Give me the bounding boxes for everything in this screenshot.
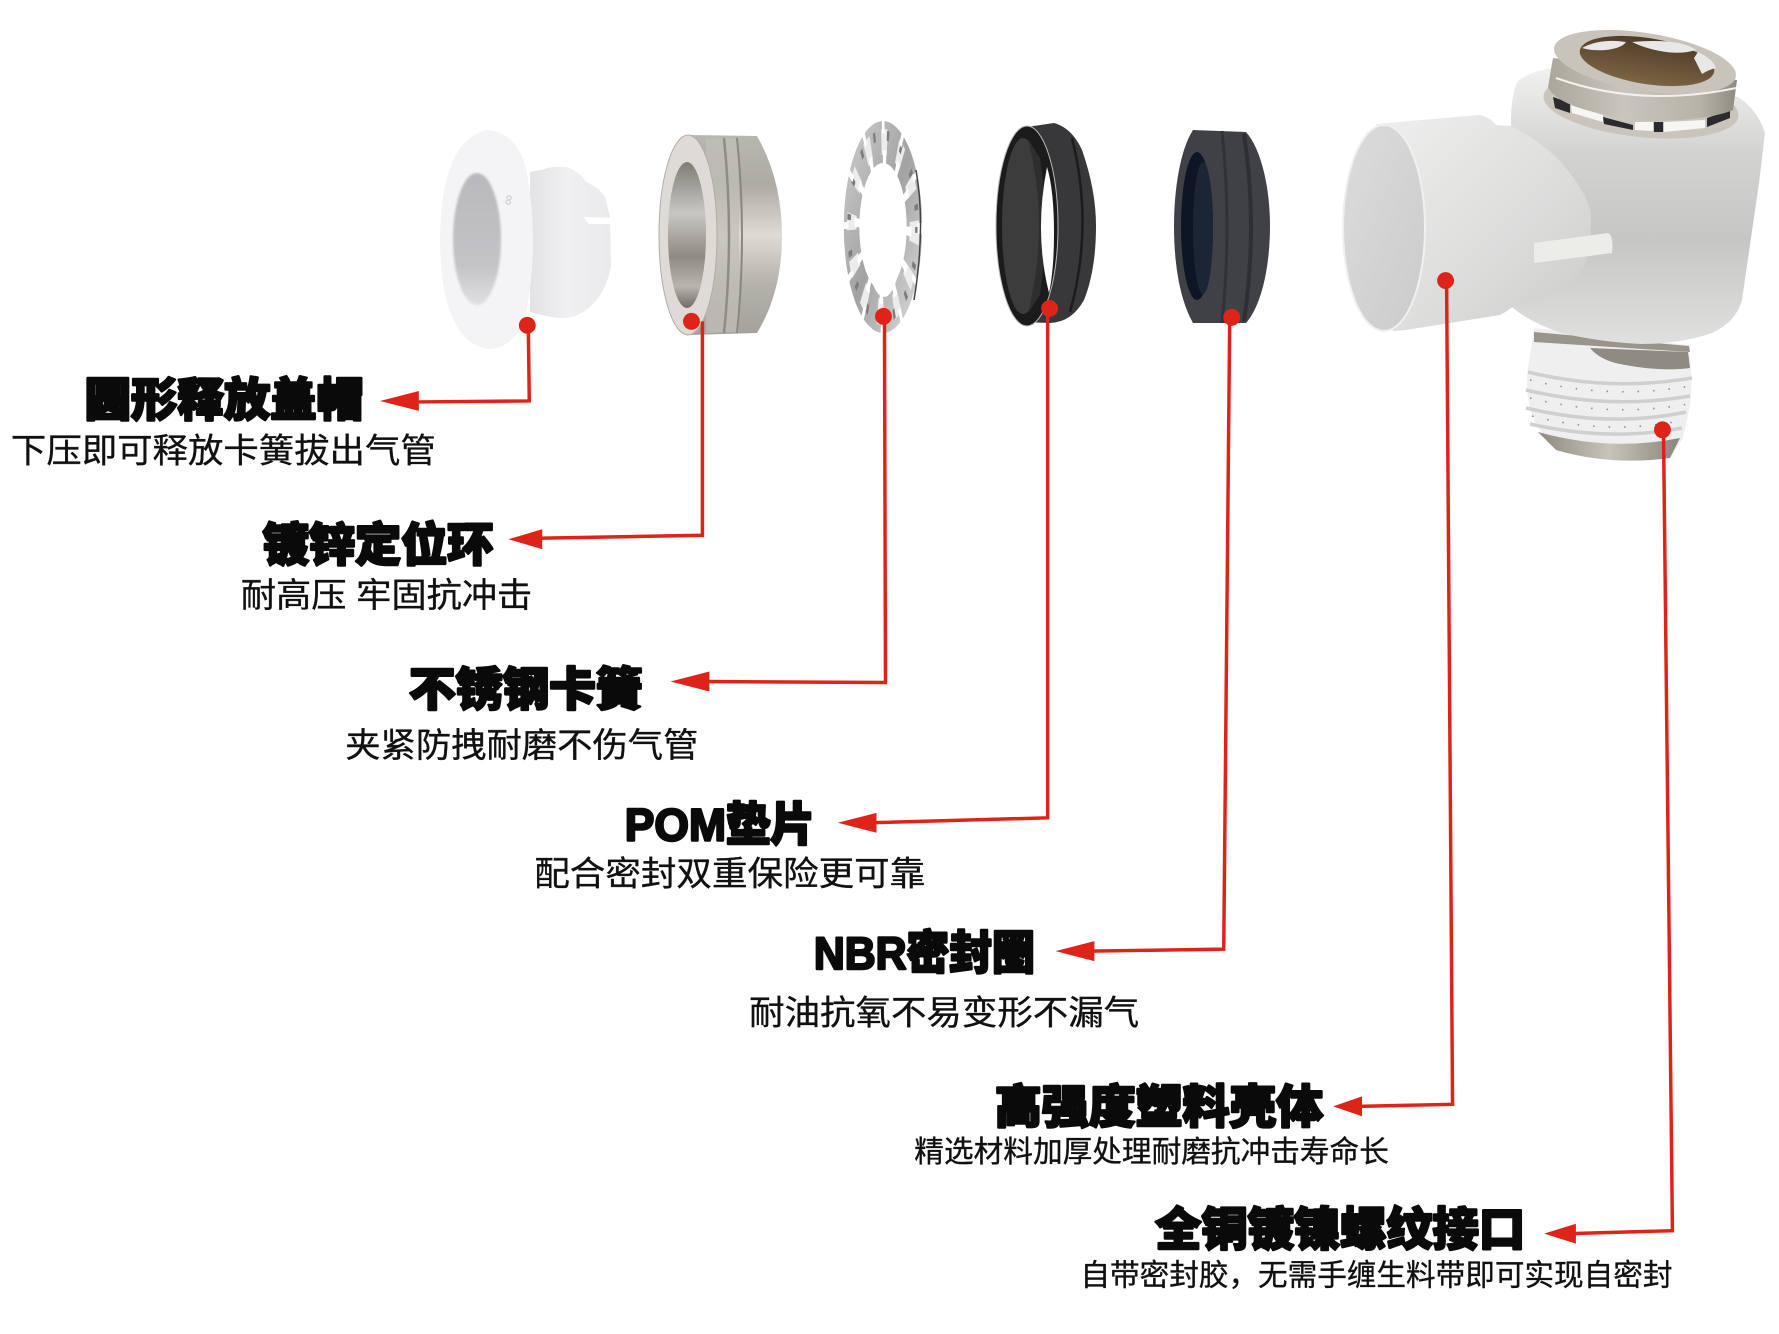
label 4 description: 配合密封双重保险更可靠 (534, 855, 925, 893)
nickel head (1540, 19, 1742, 147)
label 6 heading: 高强度塑料壳体 (995, 1082, 1323, 1133)
label 2 heading: 镀锌定位环 (263, 520, 493, 571)
label 3 description: 夹紧防拽耐磨不伤气管 (345, 727, 698, 765)
callouts: leaders and labels (11, 272, 1672, 1292)
label 6 description: 精选材料加厚处理耐磨抗冲击寿命长 (914, 1136, 1389, 1169)
part: NBR seal ring (1174, 130, 1270, 323)
leader 5: NBR ring (1056, 309, 1240, 961)
side arm (1376, 115, 1591, 331)
label 5 heading: NBR密封圈 (814, 928, 1035, 979)
part: nickel positioning ring (659, 135, 782, 335)
label 2 description: 耐高压 牢固抗冲击 (241, 577, 532, 615)
tab (1534, 233, 1612, 263)
part: plastic shell elbow with nickel head and thread (1343, 19, 1765, 461)
thread (1526, 328, 1692, 461)
leader 3: spring (671, 308, 892, 691)
part: white release cap: ∞ (499, 193, 518, 207)
leader 7: threaded connector (1544, 421, 1672, 1244)
vertical body (1511, 68, 1765, 344)
part: POM gasket (996, 123, 1096, 326)
part: stainless steel retaining spring (846, 127, 921, 327)
label 1 heading: 圆形释放盖帽 (85, 375, 363, 426)
label 3 heading: 不锈钢卡簧 (409, 664, 643, 715)
label 7 description: 自带密封胶，无需手缠生料带即可实现自密封 (1080, 1259, 1672, 1292)
part: white release cap (440, 130, 611, 349)
leader 2: zinc ring (508, 313, 702, 549)
leader 1: release cap (380, 317, 536, 411)
arm face (1343, 125, 1425, 331)
label 7 heading: 全铜镀镍螺纹接口 (1155, 1205, 1525, 1256)
label 1 description: 下压即可释放卡簧拔出气管 (11, 433, 436, 471)
leader 4: POM gasket (838, 300, 1058, 833)
leader 6: plastic shell (1333, 272, 1454, 1116)
label 4 heading: POM垫片 (625, 800, 815, 851)
label 5 description: 耐油抗氧不易变形不漏气 (749, 995, 1139, 1033)
